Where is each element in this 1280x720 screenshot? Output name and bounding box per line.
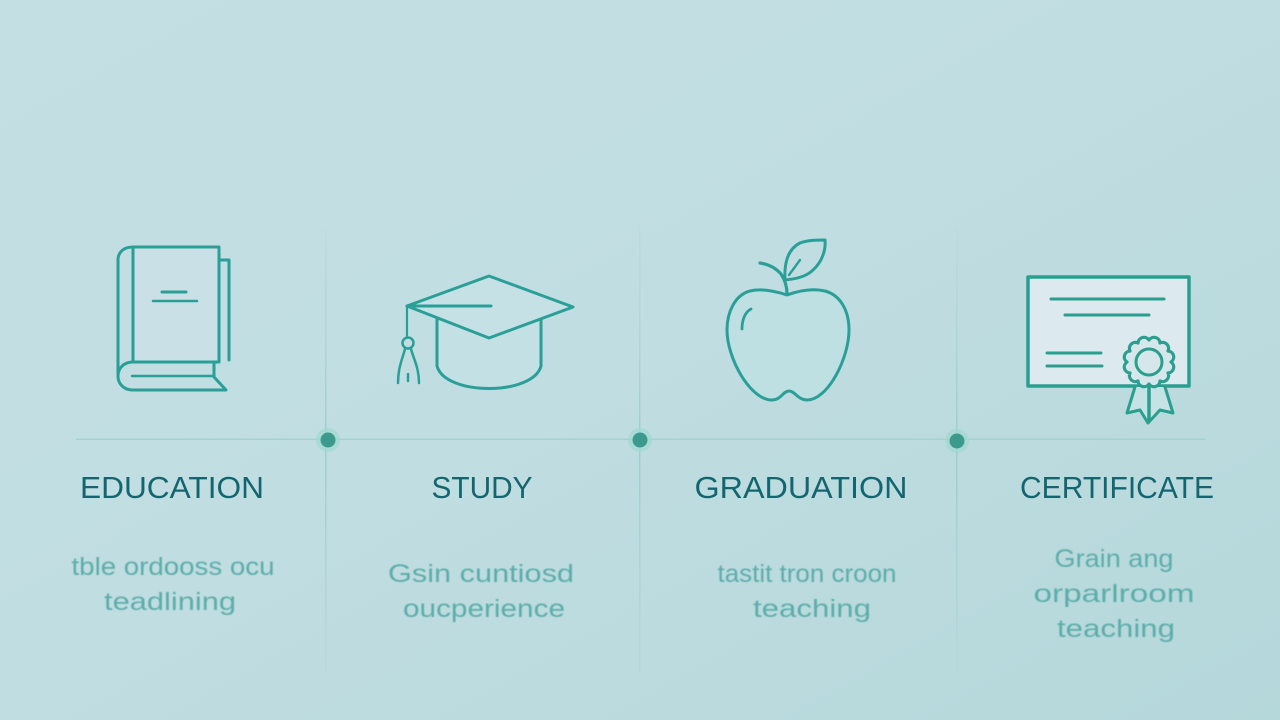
text: education description	[72, 553, 274, 616]
text: certificate description: teaching	[1057, 615, 1175, 643]
text: graduation description: teaching	[753, 595, 871, 623]
icon: certificate with ribbon	[1028, 277, 1189, 423]
timeline dot 1	[316, 428, 340, 452]
icon: book	[118, 247, 229, 390]
text: certificate description: Grain ang	[1054, 545, 1174, 573]
text: graduation description	[718, 560, 896, 623]
text: study description: Gsin cuntiosd	[388, 560, 574, 588]
heading: study: STUDY	[432, 470, 532, 505]
heading: graduation: GRADUATION	[694, 470, 908, 505]
icon: apple	[727, 240, 849, 400]
heading: education: EDUCATION	[80, 470, 264, 505]
text: study description	[388, 560, 574, 623]
text: graduation description: tastit tron croon	[718, 560, 896, 588]
heading: certificate: CERTIFICATE	[1020, 470, 1214, 505]
text: certificate description	[1034, 545, 1194, 643]
text: education description: tble ordooss ocu	[72, 553, 274, 581]
timeline dot 2	[628, 428, 652, 452]
timeline dot 3	[945, 429, 969, 453]
text: education description: teadlining	[104, 588, 236, 616]
icon: graduation cap	[398, 276, 573, 388]
text: study description: oucperience	[403, 595, 565, 623]
text: certificate description: orparlroom	[1034, 580, 1194, 608]
